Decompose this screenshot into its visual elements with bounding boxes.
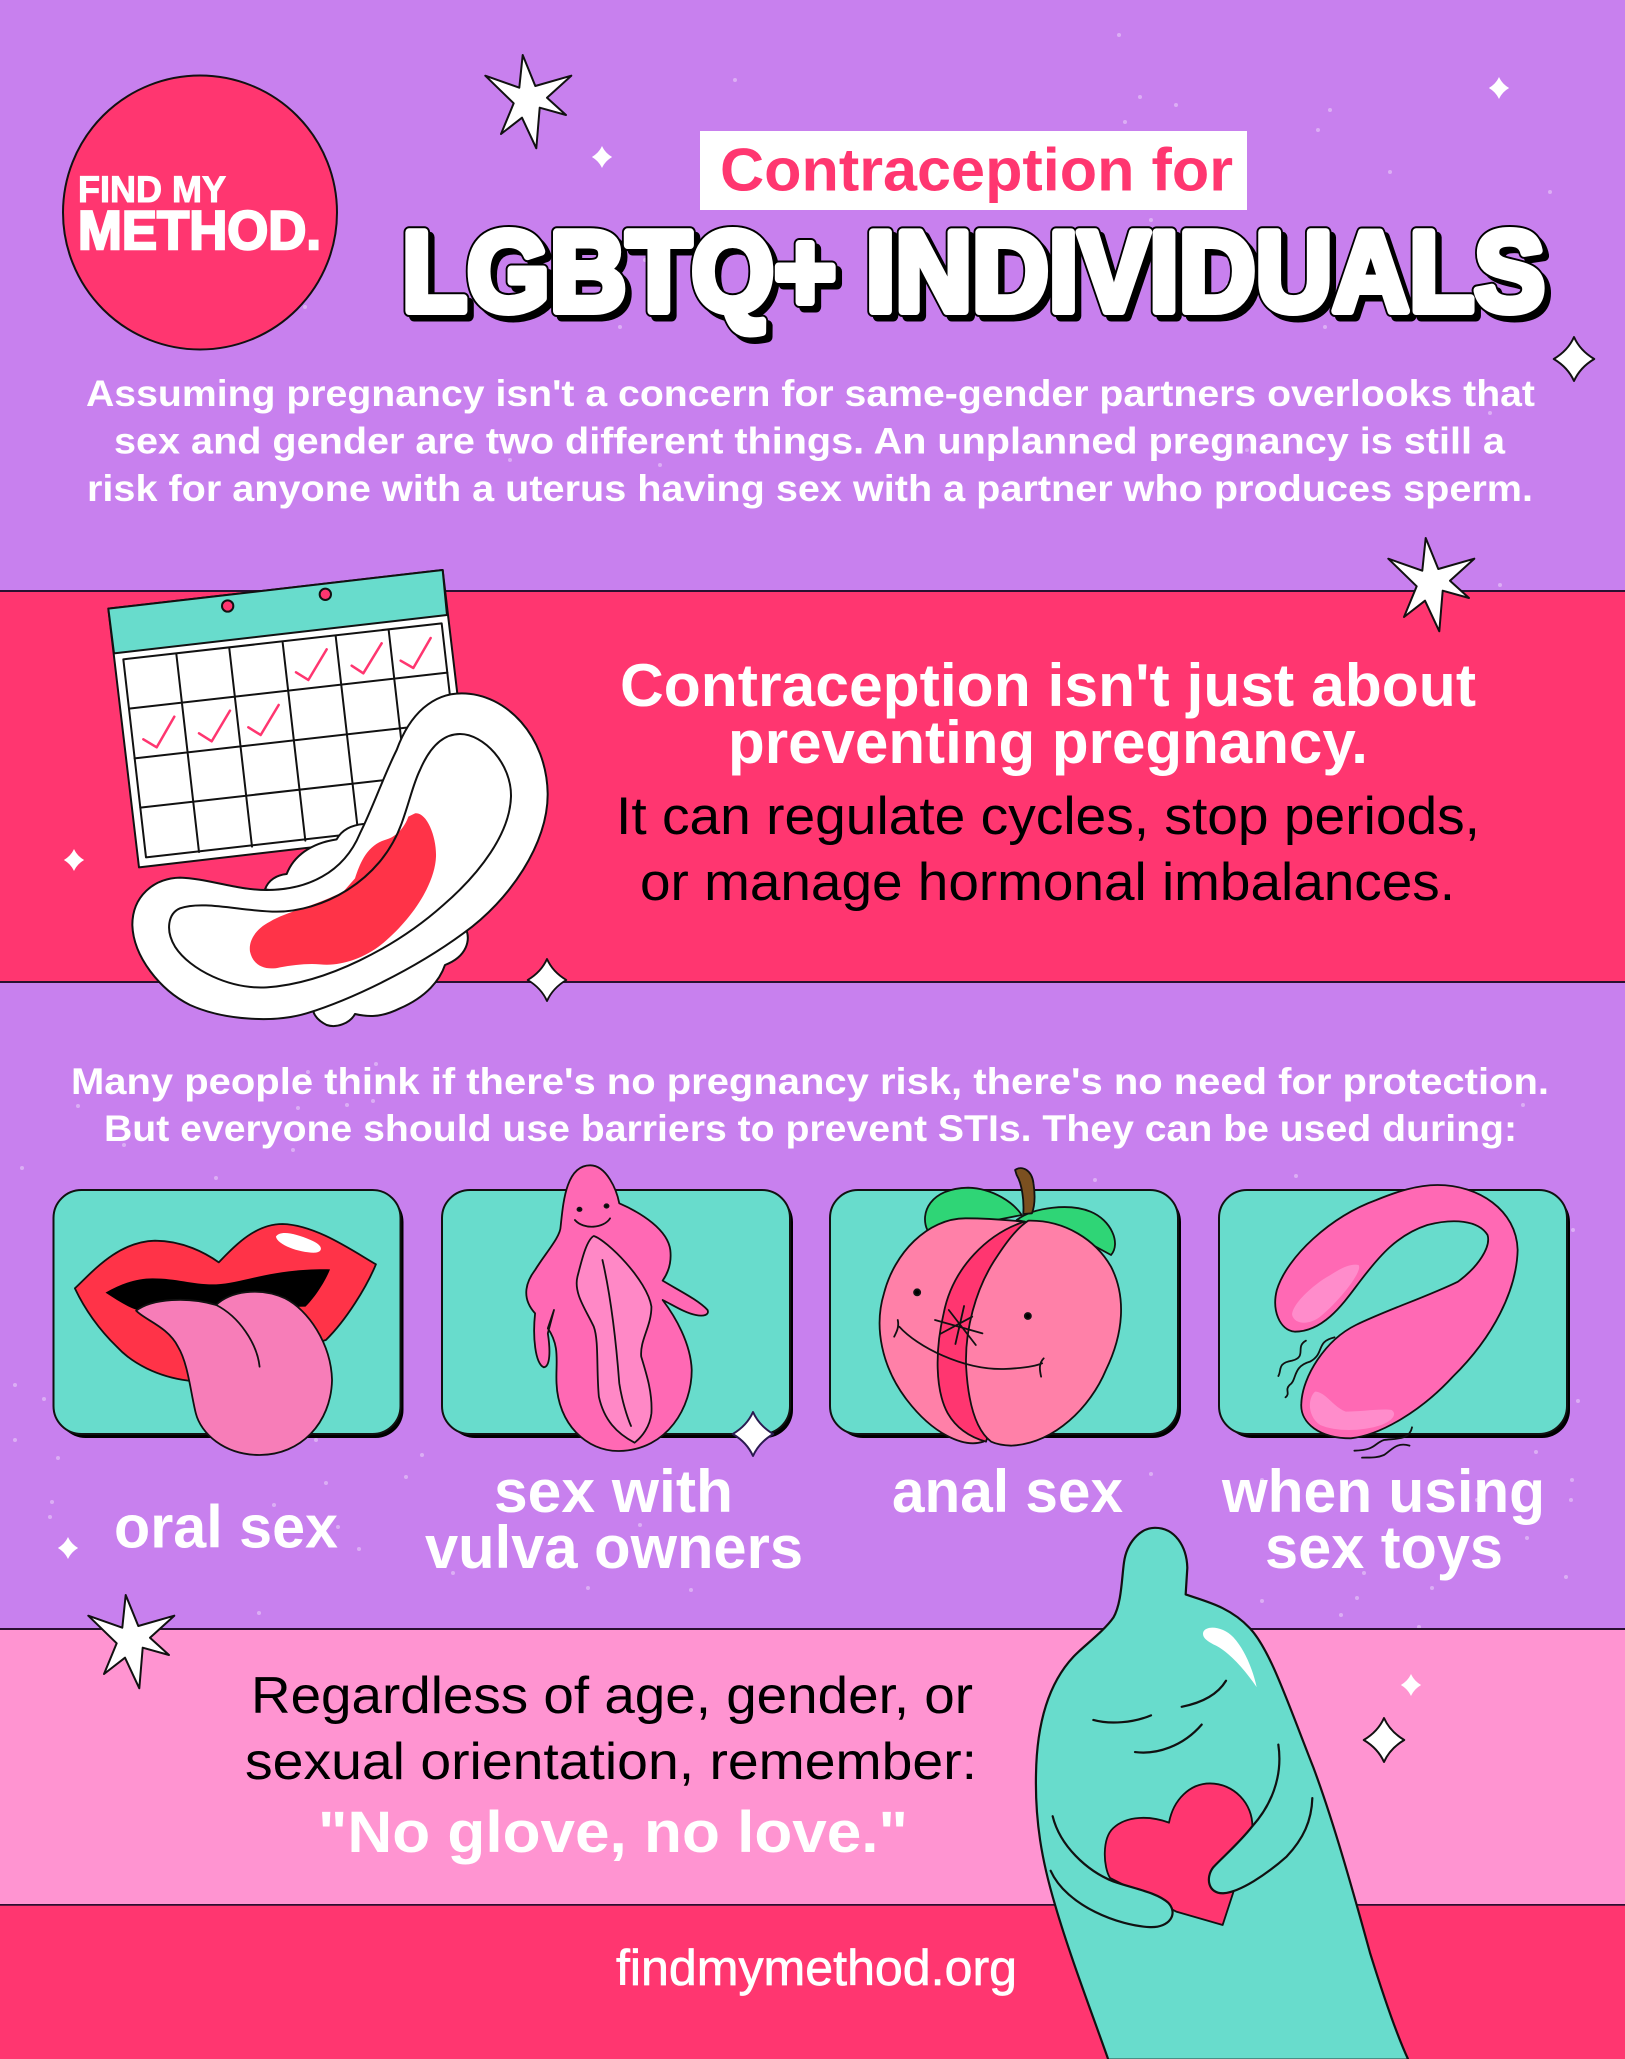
labels: barrier uses: sex with bbox=[494, 1458, 733, 1525]
title: LGBTQ+ Individuals: LGBTQ+ INDIVIDUALS bbox=[407, 214, 1550, 341]
labels: barrier uses: oral sex bbox=[114, 1494, 338, 1560]
panel: oral sex bbox=[54, 1190, 404, 1455]
intro paragraph bbox=[86, 373, 1535, 509]
panel: vulva bbox=[442, 1165, 793, 1451]
logo: Find My Method bbox=[63, 76, 337, 350]
text: regulate cycles bbox=[616, 787, 1480, 912]
text: barriers intro: But everyone should use barriers to prevent STIs. They can be used during: bbox=[104, 1108, 1517, 1149]
illustration: calendar with check marks bbox=[108, 570, 473, 867]
icon: smiling peach bbox=[880, 1168, 1121, 1446]
text: regulate cycles: or manage hormonal imbalances. bbox=[640, 853, 1455, 912]
text: barriers intro: Many people think if there's no pregnancy risk, there's no need for protection. bbox=[71, 1061, 1549, 1102]
heading: contraception benefits bbox=[620, 652, 1476, 776]
labels: barrier uses: vulva owners bbox=[425, 1514, 803, 1581]
title: LGBTQ+ Individuals: LGBTQ+ INDIVIDUALS bbox=[402, 209, 1545, 336]
sparkle on vulva panel bbox=[733, 1412, 773, 1456]
intro paragraph: sex and gender are two different things. An unplanned pregnancy is still a bbox=[114, 420, 1505, 462]
labels: barrier uses bbox=[114, 1458, 1545, 1581]
panel: anal sex bbox=[830, 1168, 1181, 1446]
sparkles lower left bbox=[58, 1537, 174, 1688]
slogan: "No glove, no love." bbox=[318, 1800, 908, 1865]
panel: sex toys bbox=[1219, 1185, 1570, 1458]
sparkle over pad bbox=[528, 959, 566, 1001]
text: regulate cycles: It can regulate cycles, stop periods, bbox=[616, 787, 1480, 846]
intro paragraph: Assuming pregnancy isn't a concern for same-gender partners overlooks that bbox=[86, 373, 1535, 414]
website url: findmymethod.org bbox=[616, 1940, 1017, 1996]
sparkles beside condom bbox=[1364, 1674, 1421, 1762]
sparkle stars around header bbox=[64, 55, 1594, 871]
icon: lips and tongue bbox=[75, 1224, 376, 1455]
band: pink footer bbox=[0, 1905, 1625, 2059]
icon: vibrator bbox=[1275, 1185, 1518, 1458]
labels: barrier uses: when using bbox=[1221, 1458, 1545, 1525]
title chip: Contraception for: Contraception for bbox=[720, 136, 1233, 204]
illustration: sanitary pad bbox=[132, 693, 548, 1026]
logo: Find My Method: METHOD. bbox=[78, 199, 321, 261]
text: regardless reminder bbox=[245, 1667, 977, 1791]
text: barriers intro bbox=[71, 1061, 1549, 1149]
heading: contraception benefits: Contraception isn't just about bbox=[620, 652, 1476, 719]
band: light pink reminder section bbox=[0, 1629, 1625, 1905]
icon: smiling vulva bbox=[526, 1165, 708, 1451]
intro paragraph: risk for anyone with a uterus having sex with a partner who produces sperm. bbox=[87, 468, 1533, 509]
text: regardless reminder: Regardless of age, gender, or bbox=[251, 1667, 973, 1725]
band: pink contraception section bbox=[0, 591, 1625, 982]
text: regardless reminder: sexual orientation, remember: bbox=[245, 1733, 977, 1791]
labels: barrier uses: sex toys bbox=[1265, 1514, 1503, 1581]
labels: barrier uses: anal sex bbox=[892, 1458, 1123, 1525]
logo: Find My Method: FIND MY bbox=[78, 169, 226, 210]
title: LGBTQ+ Individuals: LGBTQ+ INDIVIDUALS bbox=[402, 209, 1545, 336]
illustration: condom hugging heart bbox=[1036, 1528, 1408, 2059]
heading: contraception benefits: preventing pregnancy. bbox=[728, 709, 1368, 776]
